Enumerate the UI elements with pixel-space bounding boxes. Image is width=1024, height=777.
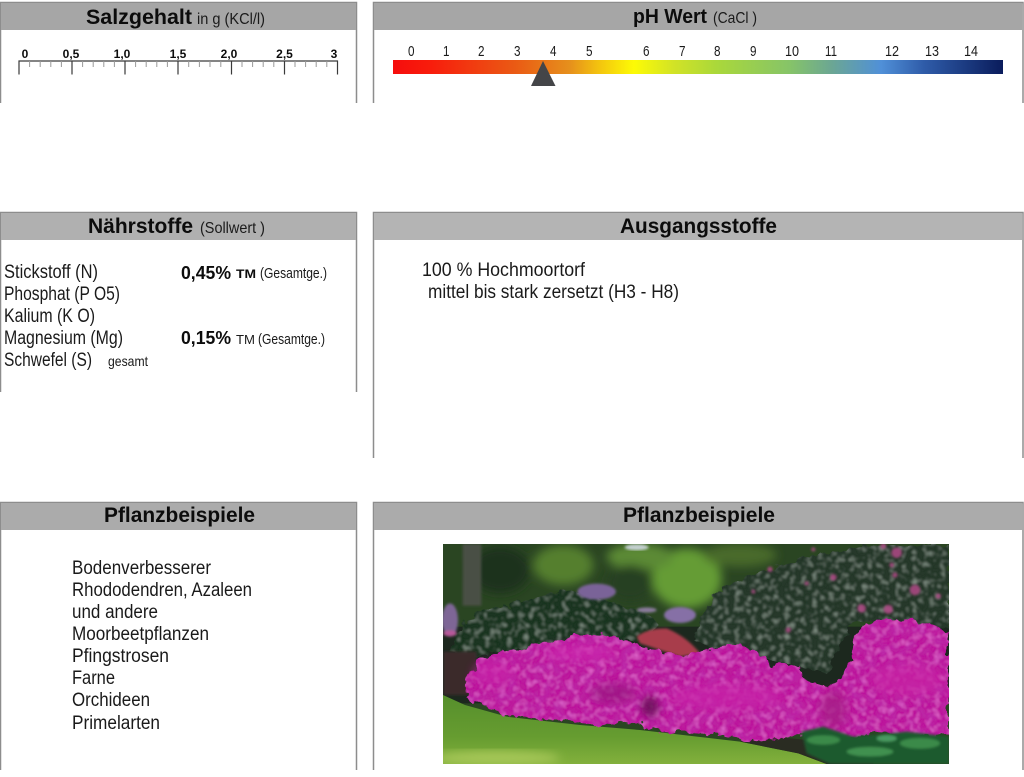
heading: Pflanzbeispiele [374,503,1022,530]
panel: Salzgehalt [0,2,356,103]
heading: Pflanzbeispiele: Pflanzbeispiele [104,504,255,527]
nutrient values: 0,15% [181,328,231,348]
source materials text: mittel bis stark zersetzt (H3 - H8) [428,282,679,303]
pH scale numbers: 7 [679,43,686,60]
plant list: Primelarten [72,713,160,734]
photo: azalea garden [433,543,949,766]
nutrient values: TM [236,267,256,281]
pH scale numbers: 6 [643,43,650,60]
salt scale ruler: 0,5 [63,47,80,61]
heading: pH Wert [374,3,1022,30]
nutrient names: Magnesium (Mg) [4,328,123,349]
heading: Salzgehalt: Salzgehalt [86,6,192,29]
pH scale numbers: 4 [550,43,556,60]
plant list: Farne [72,668,115,689]
panel frame [374,212,1023,458]
plant list: Orchideen [72,690,150,711]
pH scale numbers: 13 [925,43,939,60]
plant list: Rhododendren, Azaleen [72,580,252,601]
panel: Nährstoffe [0,212,356,392]
salt scale ruler [18,47,338,74]
magenta azaleas [466,619,949,742]
panel: Pflanzbeispiele photo [374,502,1023,770]
pink flowers on shrub [751,543,941,633]
pH scale numbers: 2 [478,43,484,60]
salt scale ruler: 2,5 [276,47,293,61]
heading: Pflanzbeispiele: Pflanzbeispiele [623,504,775,527]
pH scale numbers: 0 [408,43,414,60]
salt scale ruler: 1,5 [170,47,187,61]
heading: Nährstoffe: (Sollwert ) [200,220,265,237]
heading: Ausgangsstoffe [374,213,1022,240]
heading: Nährstoffe [1,213,356,240]
pH scale numbers: 8 [714,43,720,60]
panel: pH Wert [374,2,1023,103]
pH colour bar [393,60,1003,74]
nutrient values: (Gesamtge.) [258,331,325,348]
plant list [72,558,252,734]
panel frame [0,2,356,103]
pH marker triangle [531,61,556,86]
heading: Pflanzbeispiele [1,503,356,530]
panel frame [0,212,356,392]
nutrient values: TM [236,332,255,347]
panel: Ausgangsstoffe [374,212,1023,458]
lawn [443,695,827,764]
heading: Salzgehalt [1,3,356,30]
pH scale numbers: 5 [586,43,592,60]
nutrient names: gesamt [108,353,148,369]
plant list: Bodenverbesserer [72,558,212,579]
pH scale numbers: 1 [443,43,450,60]
nutrient names [4,262,148,371]
plant list: Moorbeetpflanzen [72,624,209,645]
heading: Ausgangsstoffe: Ausgangsstoffe [620,215,777,238]
plant list: Pfingstrosen [72,646,169,667]
pH scale numbers: 11 [825,43,837,60]
hosta leaves [802,727,949,764]
source materials text: 100 % Hochmoortorf [422,260,586,281]
source materials text [422,260,679,303]
nutrient names: Phosphat (P O5) [4,284,120,305]
heading: pH Wert: pH Wert [633,6,707,28]
nutrient names: Schwefel (S) [4,350,92,371]
nutrient values [181,263,327,348]
salt scale ruler: 1,0 [114,47,131,61]
dark underlayer behind azaleas [443,627,949,703]
panel frame [374,2,1023,103]
salt scale ruler: 3 [331,47,338,61]
pH scale numbers [408,43,978,60]
pH scale numbers: 12 [885,43,899,60]
nutrient names: Kalium (K O) [4,306,95,327]
plant list: und andere [72,602,158,623]
nutrient values: 0,45% [181,263,231,283]
salt scale ruler: 0 [22,47,29,61]
pH scale numbers: 10 [785,43,799,60]
nutrient values: (Gesamtge.) [260,265,327,282]
heading: pH Wert: (CaCl ) [713,10,757,27]
panel frame [374,502,1023,770]
pH scale numbers: 3 [514,43,520,60]
heading: Nährstoffe: Nährstoffe [88,215,193,238]
pH scale numbers: 9 [750,43,756,60]
nutrient names: Stickstoff (N) [4,262,98,283]
panel: Pflanzbeispiele list [0,502,356,770]
heading: Salzgehalt: in g (KCl/l) [197,11,265,28]
salt scale ruler: 2,0 [221,47,238,61]
pH scale numbers: 14 [964,43,978,60]
panel frame [0,502,356,770]
